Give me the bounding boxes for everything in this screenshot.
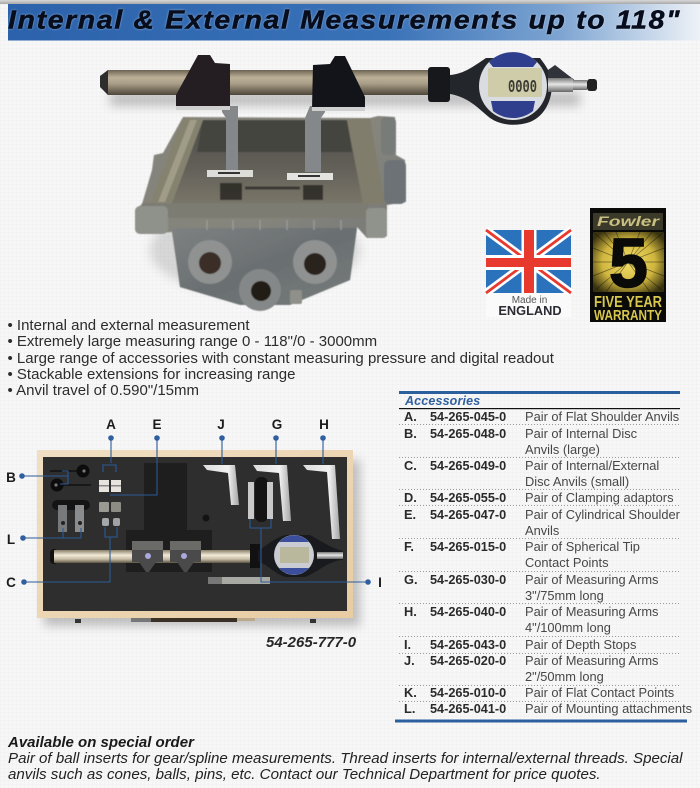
product photo: bore gauge on casting bbox=[100, 52, 597, 311]
gauge rod in case bbox=[50, 549, 254, 564]
table rows: C. bbox=[404, 458, 417, 473]
table rows: 54-265-020-0 bbox=[430, 654, 506, 668]
table rows: Pair of Spherical Tip bbox=[525, 539, 640, 554]
table rows: Pair of Internal Disc bbox=[525, 426, 638, 441]
table rows: 3"/75mm long bbox=[525, 588, 604, 603]
gauge shadow bbox=[110, 92, 580, 106]
table rows: Pair of Measuring Arms bbox=[525, 604, 658, 619]
table rows: Contact Points bbox=[525, 555, 609, 570]
indicator in case bbox=[250, 535, 343, 577]
table rows: 54-265-010-0 bbox=[430, 686, 506, 700]
feature bullet list: • Anvil travel of 0.590"/15mm bbox=[8, 382, 199, 399]
table rows: Pair of Flat Shoulder Anvils bbox=[525, 409, 679, 424]
sliding anvil blocks bbox=[176, 55, 365, 111]
foam cutouts bbox=[52, 463, 268, 572]
small disc anvils C bbox=[102, 518, 120, 526]
casting ribs bbox=[207, 220, 341, 230]
table rows: A. bbox=[404, 409, 417, 424]
table rows: Pair of Mounting attachments bbox=[525, 701, 692, 716]
feature bullet list: • Internal and external measurement bbox=[8, 317, 250, 334]
table rows: 54-265-015-0 bbox=[430, 540, 506, 554]
feature bullet list bbox=[8, 317, 555, 399]
badge: Fowler five year warranty bbox=[590, 208, 666, 324]
table rows: 54-265-041-0 bbox=[430, 702, 506, 716]
table rows: 54-265-030-0 bbox=[430, 573, 506, 587]
feature bullet list: • Stackable extensions for increasing range bbox=[8, 366, 295, 383]
anvil blocks in case bbox=[132, 541, 201, 572]
badge: Fowler five year warranty: Fowler bbox=[597, 213, 661, 229]
table rows: Pair of Internal/External bbox=[525, 458, 659, 473]
casting bbox=[135, 116, 406, 311]
ports bbox=[188, 240, 232, 284]
table rows: Pair of Measuring Arms bbox=[525, 653, 658, 668]
callout letters: G bbox=[272, 417, 282, 432]
wooden case bbox=[37, 450, 353, 623]
title: Internal & External Measurements up to 118" bbox=[8, 6, 681, 34]
inner fixture bbox=[220, 183, 242, 200]
badge: Fowler five year warranty: 5 bbox=[609, 224, 648, 302]
table rows: 54-265-048-0 bbox=[430, 427, 506, 441]
callout letters: J bbox=[217, 417, 225, 432]
table rows: Anvils (large) bbox=[525, 442, 600, 457]
table rows: 54-265-049-0 bbox=[430, 459, 506, 473]
disc anvils B bbox=[50, 464, 91, 492]
table rows: K. bbox=[404, 685, 417, 700]
callout letters bbox=[6, 417, 382, 590]
readout: 0000 bbox=[508, 78, 537, 98]
callout letters: C bbox=[6, 575, 16, 590]
table rows: 54-265-055-0 bbox=[430, 491, 506, 505]
table rows: Pair of Clamping adaptors bbox=[525, 490, 674, 505]
table rows: 54-265-040-0 bbox=[430, 605, 506, 619]
table rows: D. bbox=[404, 490, 417, 505]
table heading: Accessories bbox=[404, 394, 480, 408]
header band bbox=[0, 0, 700, 40]
special order note: Available on special order bbox=[7, 734, 195, 751]
table rows: J. bbox=[404, 653, 415, 668]
flat shoulder anvils A bbox=[99, 480, 121, 492]
feature bullet list: • Extremely large measuring range 0 - 118"/0 - 3000mm bbox=[8, 333, 377, 350]
callout letters: I bbox=[378, 575, 382, 590]
table rows: 54-265-047-0 bbox=[430, 508, 506, 522]
title: Internal & External Measurements up to 118" bbox=[8, 6, 681, 34]
feature bullet list: • Large range of accessories with constant measuring pressure and digital readout bbox=[8, 350, 555, 367]
callout letters: L bbox=[7, 532, 15, 547]
table rows: L. bbox=[404, 701, 415, 716]
table rows: Disc Anvils (small) bbox=[525, 474, 629, 489]
callout letters: H bbox=[319, 417, 329, 432]
callout letters: B bbox=[6, 470, 16, 485]
table rows: Pair of Cylindrical Shoulder bbox=[525, 507, 681, 522]
depth stops and clamps bbox=[208, 482, 273, 584]
special order note: Pair of ball inserts for gear/spline measurements. Thread inserts for internal/external threads. Special bbox=[8, 750, 683, 767]
table rows bbox=[404, 409, 692, 716]
special order note bbox=[7, 734, 683, 783]
table rows: Pair of Measuring Arms bbox=[525, 572, 658, 587]
table rows: B. bbox=[404, 426, 417, 441]
special order note: anvils such as cones, balls, pins, etc. Contact our Technical Department for price quotes. bbox=[8, 766, 601, 783]
table rows: F. bbox=[404, 539, 414, 554]
kit part number: 54-265-777-0 bbox=[266, 634, 357, 651]
callout lines bbox=[22, 438, 368, 582]
badge: union flag made in England bbox=[486, 230, 571, 318]
callout dots bbox=[19, 435, 371, 585]
mounting attachments L bbox=[58, 505, 84, 532]
table rows: 4"/100mm long bbox=[525, 620, 611, 635]
measuring arms bbox=[207, 106, 333, 180]
table rows: Pair of Flat Contact Points bbox=[525, 685, 674, 700]
kit case photo with callouts bbox=[6, 417, 382, 626]
badge: union flag made in England: ENGLAND bbox=[498, 303, 562, 318]
table rows: E. bbox=[404, 507, 416, 522]
rod bbox=[100, 70, 430, 95]
digital indicator bbox=[428, 52, 597, 125]
table rows: 54-265-043-0 bbox=[430, 638, 506, 652]
callout letters: E bbox=[152, 417, 162, 432]
callout letters: A bbox=[106, 417, 116, 432]
table rows: 54-265-045-0 bbox=[430, 410, 506, 424]
badge text: Made in bbox=[512, 295, 547, 306]
table rows: G. bbox=[404, 572, 418, 587]
table rows: Anvils bbox=[525, 523, 559, 538]
badge: Fowler five year warranty: FIVE YEAR bbox=[594, 294, 662, 311]
measuring arms J G H bbox=[203, 465, 340, 539]
table rows: H. bbox=[404, 604, 417, 619]
cylindrical anvils E bbox=[99, 502, 121, 512]
badge: Fowler five year warranty: WARRANTY bbox=[594, 307, 662, 324]
table rows: I. bbox=[404, 637, 411, 652]
table rows: 2"/50mm long bbox=[525, 669, 604, 684]
accessories table bbox=[395, 391, 692, 722]
table rows: Pair of Depth Stops bbox=[525, 637, 636, 652]
